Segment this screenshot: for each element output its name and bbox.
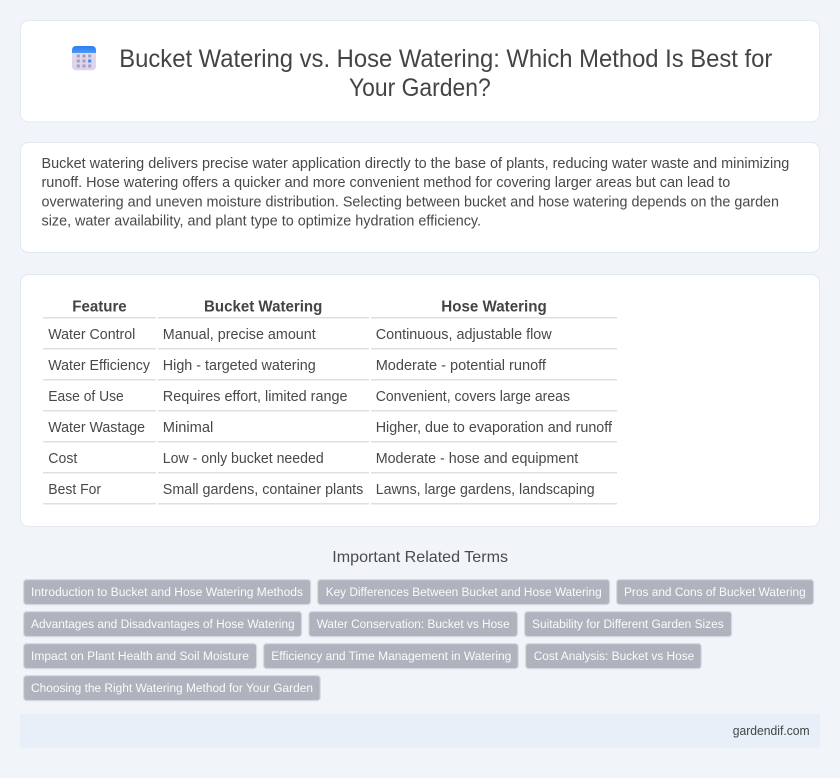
table header row: Hose Watering: [441, 298, 547, 316]
tag: Efficiency and Time Management in Watering: [271, 649, 511, 663]
title: [119, 45, 773, 102]
tag: Introduction to Bucket and Hose Watering Methods: [31, 585, 303, 599]
row: water efficiency: High - targeted watering: [163, 358, 316, 374]
row: water control: [43, 327, 617, 350]
row: water wastage: Water Wastage: [48, 420, 145, 436]
tag: [24, 644, 257, 669]
tag: [264, 644, 518, 669]
row: best for: [43, 482, 617, 504]
tag: [309, 612, 518, 637]
panel: header: [20, 20, 820, 122]
row: ease of use: [43, 389, 617, 412]
title: Your Garden?: [349, 74, 491, 102]
tag: Choosing the Right Watering Method for Your Garden: [31, 681, 313, 695]
row: water control: Water Control: [48, 327, 135, 343]
tag: [24, 612, 302, 637]
row: ease of use: Ease of Use: [48, 389, 124, 405]
table header row: Bucket Watering: [204, 298, 322, 316]
panel: intro text: [20, 142, 820, 252]
row: cost: [43, 451, 617, 474]
row: ease of use: Requires effort, limited range: [163, 389, 348, 405]
intro paragraph: runoff. Hose watering offers a quicker and more convenient method for covering larger areas but can lead to: [42, 175, 730, 191]
tag: Suitability for Different Garden Sizes: [532, 617, 724, 631]
tag: Pros and Cons of Bucket Watering: [624, 585, 806, 599]
row: cost: Moderate - hose and equipment: [376, 451, 578, 467]
row: water control: Continuous, adjustable flow: [376, 327, 552, 343]
row: water efficiency: Moderate - potential runoff: [376, 358, 547, 374]
tag: Water Conservation: Bucket vs Hose: [317, 617, 510, 631]
title: Bucket Watering vs. Hose Watering: Which Method Is Best for: [119, 45, 773, 73]
tag: Cost Analysis: Bucket vs Hose: [534, 649, 695, 663]
tag: Advantages and Disadvantages of Hose Watering: [31, 617, 295, 631]
intro paragraph: overwatering and uneven moisture distribution. Selecting between bucket and hose watering depends on the garden: [42, 194, 779, 210]
row: cost: Low - only bucket needed: [163, 451, 324, 467]
tag: [526, 644, 701, 669]
tag: Key Differences Between Bucket and Hose Watering: [326, 585, 602, 599]
row: cost: Cost: [48, 451, 77, 467]
icon: calendar: [72, 46, 96, 70]
row: best for: Small gardens, container plants: [163, 482, 363, 498]
footer bar: gardendif.com: [733, 723, 810, 738]
intro paragraph: [42, 156, 789, 230]
row: ease of use: Convenient, covers large areas: [376, 389, 570, 405]
table header row: [43, 298, 617, 318]
row: best for: Best For: [48, 482, 101, 498]
related term tags: [24, 580, 814, 701]
footer bar: [20, 714, 820, 748]
intro paragraph: size, water availability, and plant type to optimize hydration efficiency.: [42, 214, 481, 230]
tag: [318, 580, 610, 605]
row: water efficiency: Water Efficiency: [48, 358, 151, 374]
intro paragraph: Bucket watering delivers precise water application directly to the base of plants, reducing water waste and minimizing: [42, 156, 789, 172]
row: water control: Manual, precise amount: [163, 327, 316, 343]
tag: [525, 612, 732, 637]
panel: comparison table: [20, 274, 820, 526]
row: water wastage: Higher, due to evaporation and runoff: [376, 420, 613, 436]
table header row: Feature: [72, 298, 127, 316]
tag: Impact on Plant Health and Soil Moisture: [31, 649, 249, 663]
tag: [617, 580, 814, 605]
row: best for: Lawns, large gardens, landscaping: [376, 482, 595, 498]
tag: [24, 580, 311, 605]
row: water efficiency: [43, 358, 617, 380]
row: water wastage: [43, 420, 617, 442]
row: water wastage: Minimal: [163, 420, 213, 436]
tag: [24, 676, 320, 701]
heading: important related terms: Important Related Terms: [332, 549, 508, 566]
